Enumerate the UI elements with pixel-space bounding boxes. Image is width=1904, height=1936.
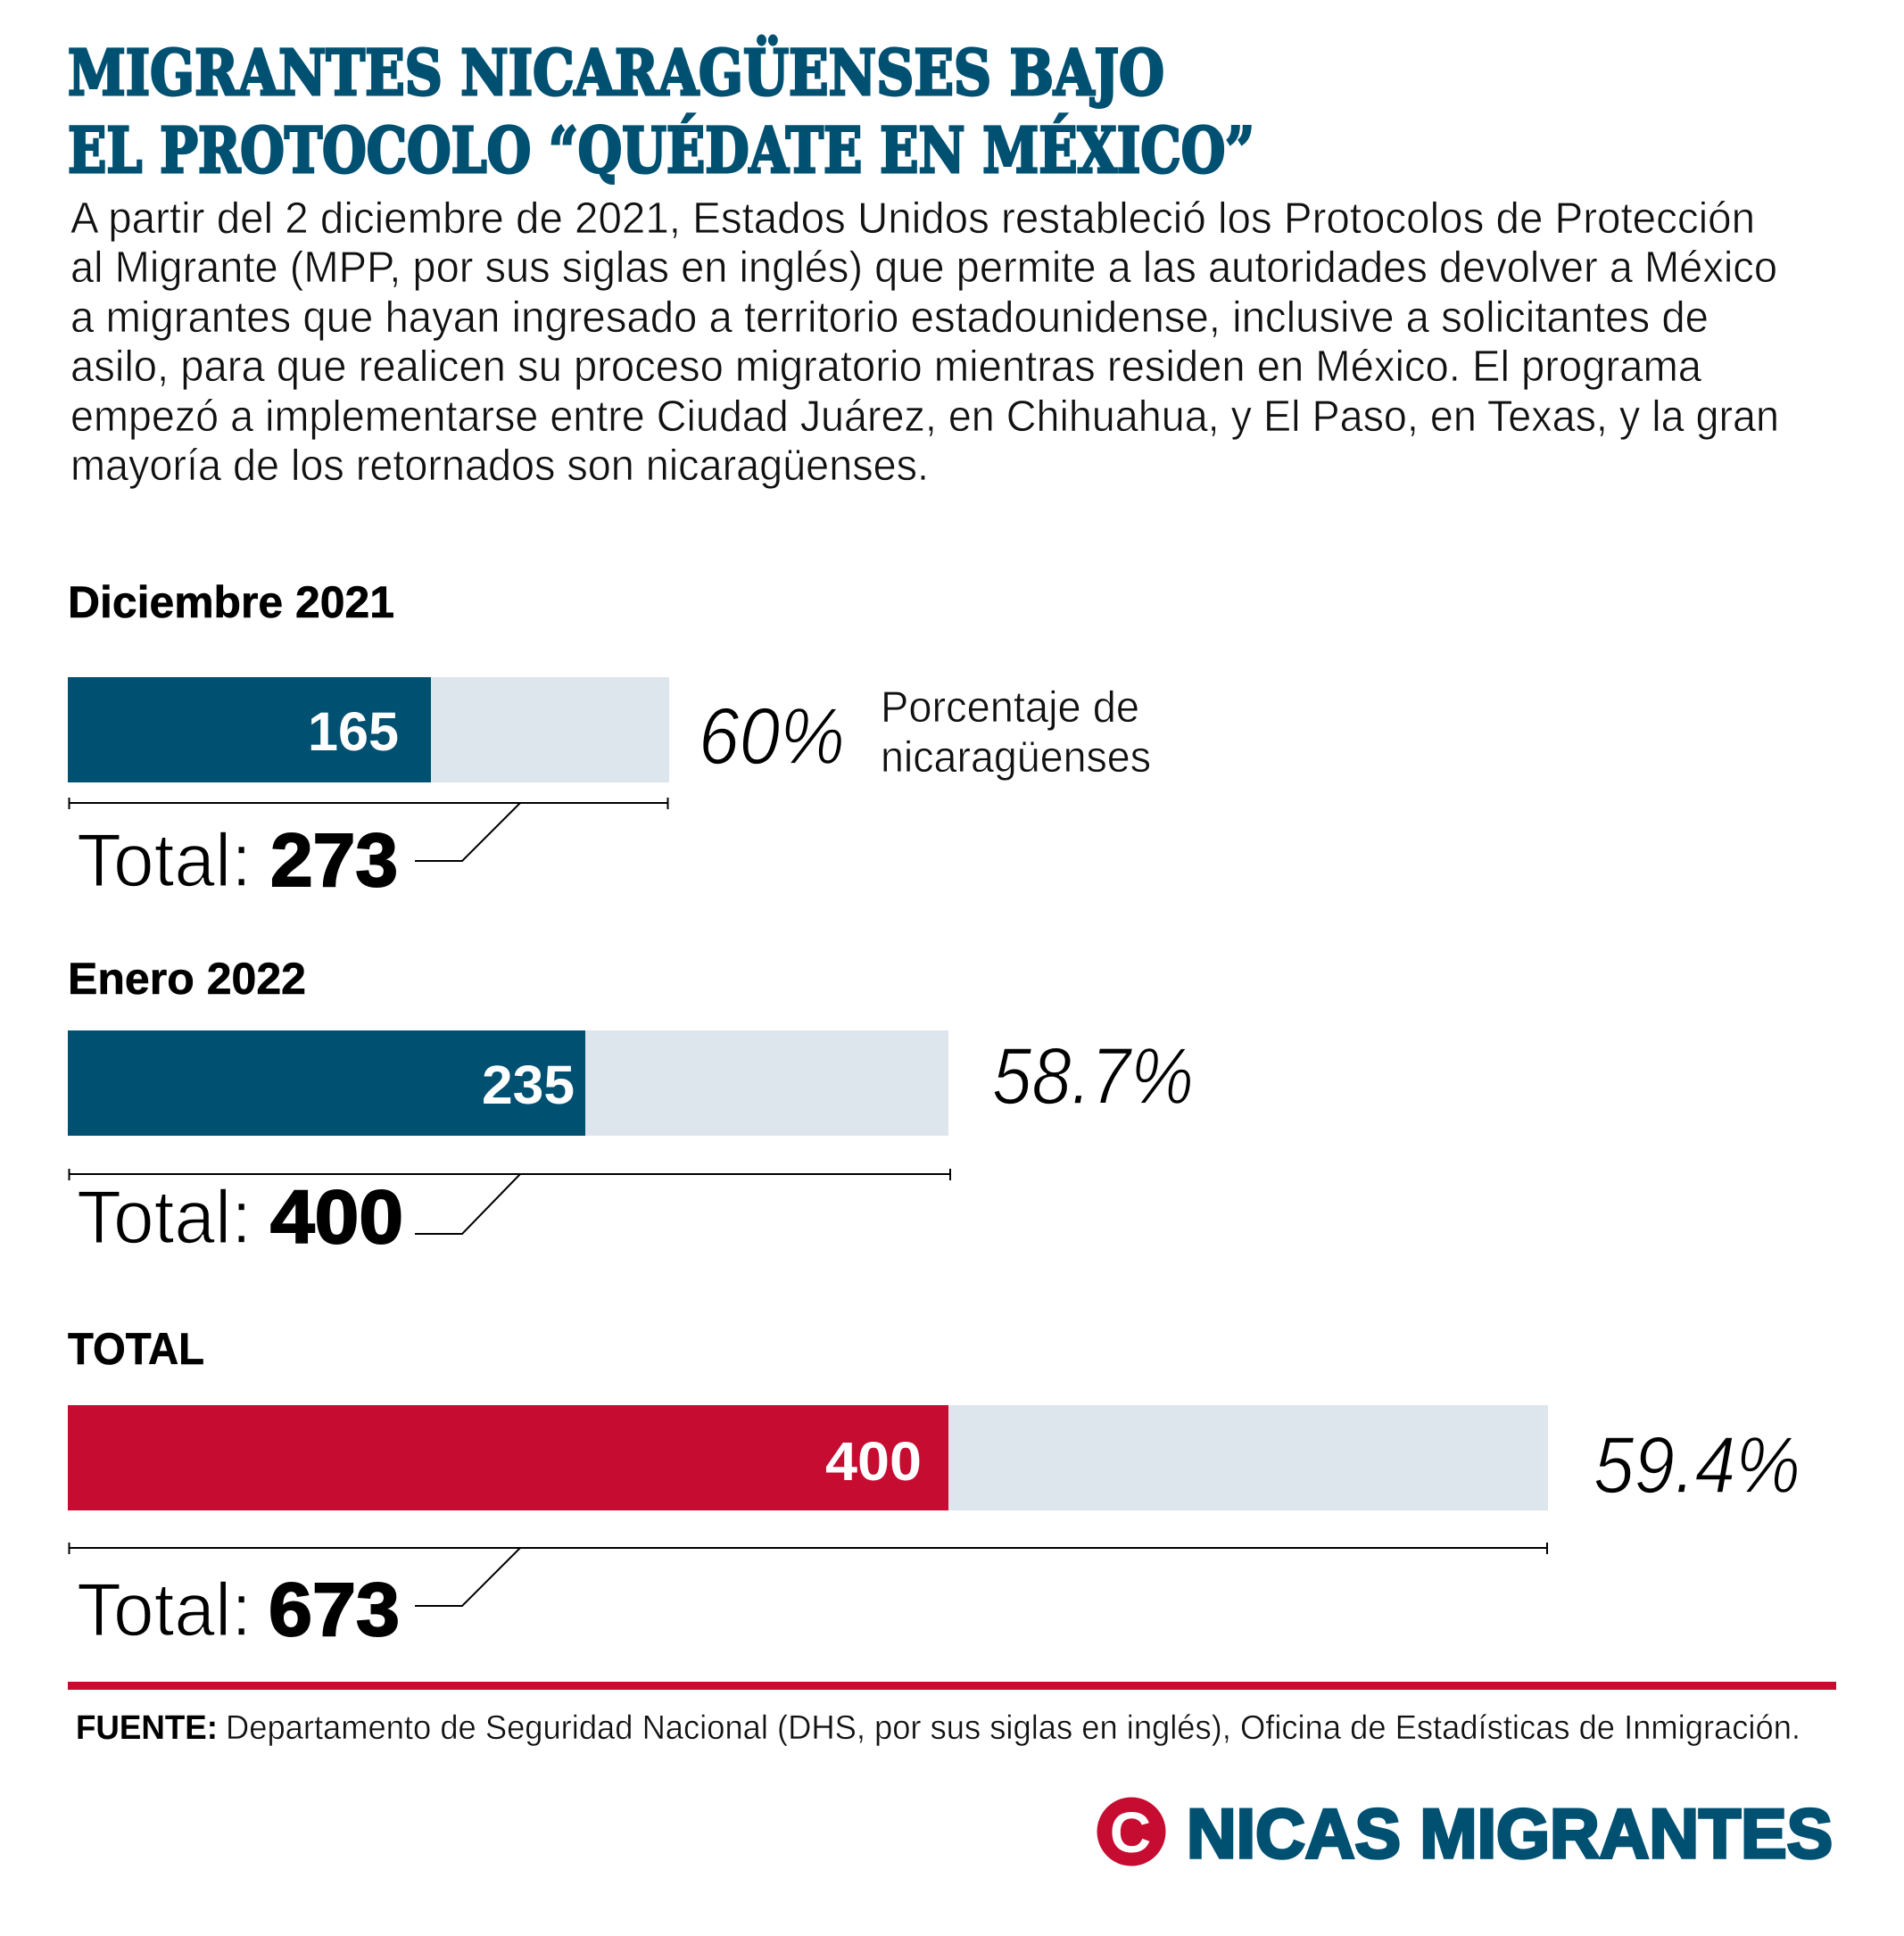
- logo: nicas migrantes: NICAS MIGRANTES: [1187, 1794, 1833, 1873]
- percentage: 58.7%: 58.7%: [992, 1032, 1194, 1121]
- bar: total: [68, 1405, 1548, 1510]
- percentage: 60%: 60%: [699, 692, 845, 782]
- heading: total: TOTAL: [68, 1324, 204, 1374]
- legend note: Porcentaje de: [881, 683, 1139, 732]
- legend note: nicaragüenses: [881, 733, 1151, 782]
- heading: enero 2022: Enero 2022: [68, 954, 306, 1004]
- source text: Departamento de Seguridad Nacional (DHS, por sus siglas en inglés), Oficina de Estadísticas de Inmigración.: [226, 1709, 1801, 1747]
- source text: FUENTE:: [76, 1709, 218, 1747]
- total: 400: Total:: [77, 1175, 252, 1259]
- panel: total: [68, 1324, 1801, 1651]
- total: 673: 673: [269, 1568, 400, 1651]
- total: 273: Total:: [77, 818, 252, 902]
- title: EL PROTOCOLO “QUÉDATE EN MÉXICO”: [68, 113, 1254, 187]
- percentage: 59.4%: 59.4%: [1594, 1421, 1801, 1510]
- panel: enero 2022: [68, 954, 1194, 1259]
- icon: logo circle: [1097, 1797, 1165, 1866]
- intro text block: [70, 194, 1779, 490]
- source rule: [68, 1682, 1836, 1690]
- title: [68, 36, 1254, 187]
- total: 400: [77, 1175, 403, 1259]
- legend note: [881, 683, 1151, 782]
- intro text block: asilo, para que realicen su proceso migratorio mientras residen en México. El programa: [70, 343, 1702, 391]
- title: MIGRANTES NICARAGÜENSES BAJO: [68, 36, 1164, 110]
- heading: diciembre 2021: Diciembre 2021: [68, 577, 394, 627]
- intro text block: empezó a implementarse entre Ciudad Juárez, en Chihuahua, y El Paso, en Texas, y la gran: [70, 393, 1779, 441]
- total: 400: 400: [270, 1175, 403, 1259]
- panel: diciembre 2021: [68, 577, 1151, 902]
- total: 673: [77, 1568, 400, 1651]
- intro text block: a migrantes que hayan ingresado a territorio estadounidense, inclusive a solicitantes de: [70, 294, 1709, 342]
- total: 273: 273: [270, 818, 398, 902]
- icon: logo circle: C: [1110, 1800, 1151, 1865]
- bracket: total 400: [70, 1169, 950, 1234]
- bar: enero 2022: [68, 1030, 948, 1136]
- bar: diciembre 2021: 165: [308, 701, 399, 762]
- bar: total: 400: [825, 1431, 922, 1492]
- bar: enero 2022: 235: [482, 1055, 575, 1115]
- bracket: total 673: [70, 1543, 1547, 1606]
- bar: diciembre 2021: [68, 677, 669, 782]
- bracket: total 273: [70, 798, 667, 861]
- intro text block: al Migrante (MPP, por sus siglas en inglés) que permite a las autoridades devolver a México: [70, 244, 1777, 292]
- total: 673: Total:: [77, 1568, 252, 1651]
- total: 273: [77, 818, 398, 902]
- intro text block: mayoría de los retornados son nicaragüenses.: [70, 442, 929, 490]
- intro text block: A partir del 2 diciembre de 2021, Estados Unidos restableció los Protocolos de Protección: [70, 194, 1755, 243]
